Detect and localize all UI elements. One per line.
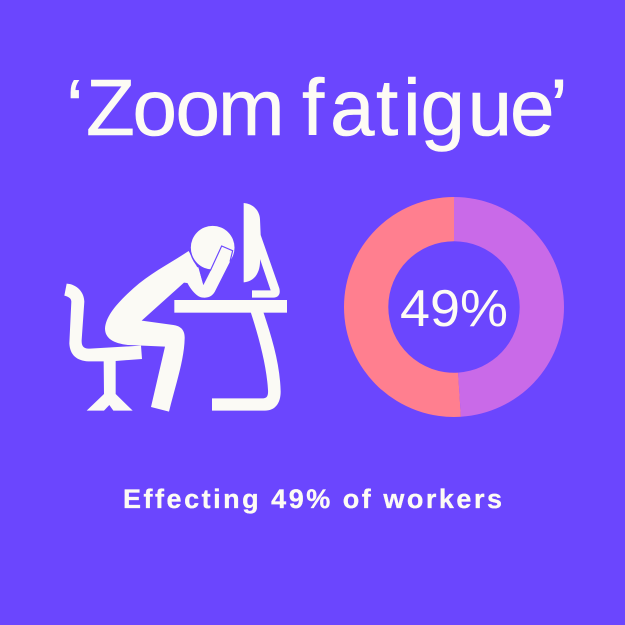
- desk top: [174, 300, 287, 313]
- remaining share: [344, 197, 461, 417]
- chair: [64, 284, 142, 411]
- monitor: [244, 203, 280, 298]
- neck gap and hand outline: [191, 246, 233, 285]
- head: [191, 226, 234, 269]
- icon: exhausted worker at desk: [64, 203, 287, 412]
- desk leg: [212, 312, 281, 411]
- 49% share: [454, 197, 564, 417]
- torso and legs: [105, 251, 203, 412]
- caption: Effecting 49% of workers: [123, 484, 502, 514]
- arm and hand: [185, 246, 233, 298]
- donut value: 49%: [400, 280, 508, 338]
- title: ‘Zoom fatigue’: [66, 63, 568, 152]
- donut chart: 49%: [344, 197, 564, 417]
